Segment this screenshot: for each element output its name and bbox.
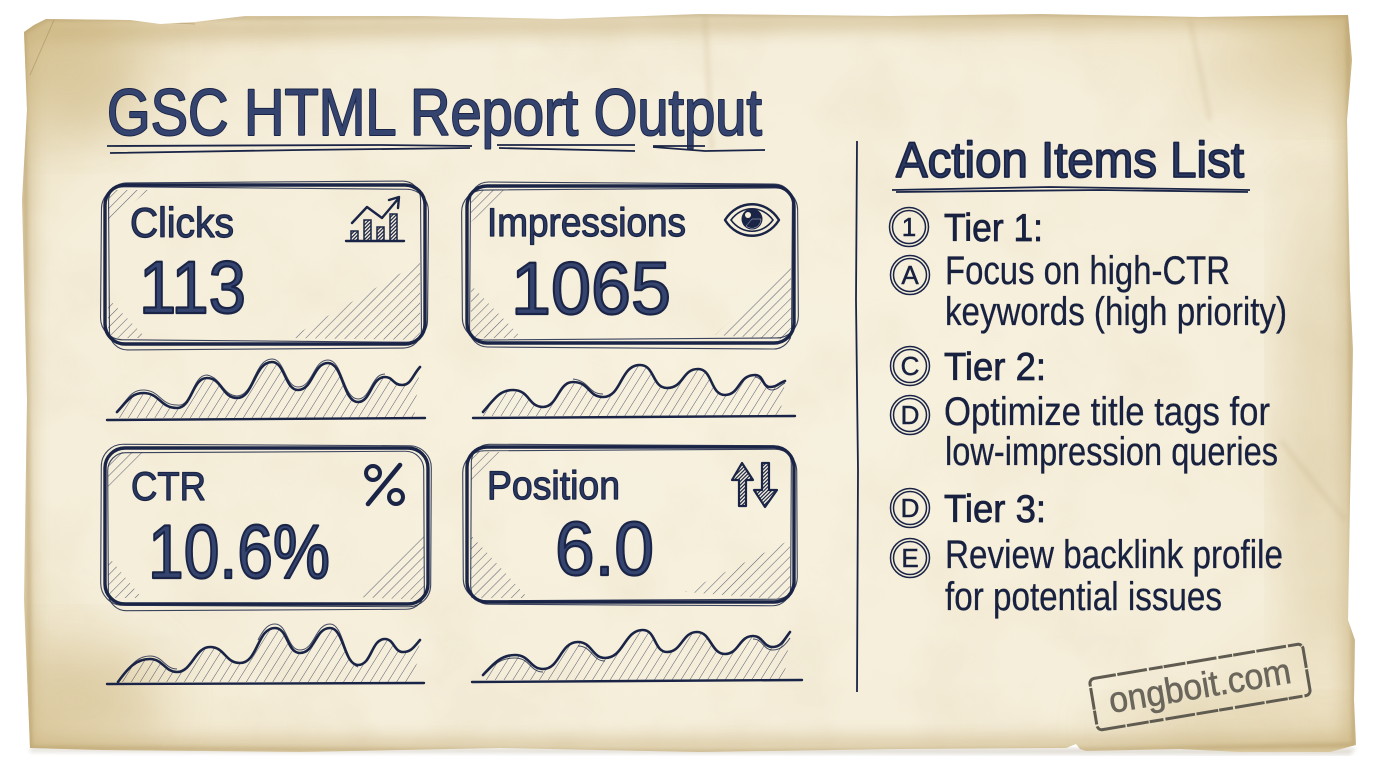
panel: position card bbox=[463, 444, 797, 606]
badge: C bbox=[890, 346, 930, 386]
item: tier 1 action: keywords (high priority) bbox=[945, 290, 1287, 334]
stamp: ongboit.com: ongboit.com bbox=[1106, 650, 1294, 721]
item: tier 3 action bbox=[945, 533, 1283, 619]
item: tier 3 action: for potential issues bbox=[945, 575, 1222, 619]
panel: impressions card bbox=[461, 182, 799, 349]
heading: action items list: Action Items List bbox=[896, 132, 1244, 188]
label: position: Position bbox=[487, 464, 620, 508]
corner hatching bbox=[471, 190, 791, 340]
label: ctr: CTR bbox=[131, 465, 206, 509]
corner hatching bbox=[471, 452, 790, 600]
title underline bbox=[107, 145, 765, 153]
item: tier 3 heading: Tier 3: bbox=[944, 488, 1046, 531]
badge: D second: D bbox=[901, 493, 919, 523]
panel: clicks card bbox=[100, 181, 429, 350]
corner hatching bbox=[108, 190, 420, 340]
badge: A: A bbox=[901, 260, 919, 290]
icon: rising chart bbox=[346, 197, 404, 241]
badge: E: E bbox=[901, 543, 919, 573]
item: tier 1 action: Focus on high-CTR bbox=[945, 249, 1230, 293]
title: GSC HTML Report Output bbox=[107, 75, 762, 149]
sparkline: clicks bbox=[107, 359, 425, 420]
item: tier 2 action: Optimize title tags for bbox=[944, 390, 1270, 434]
sparkline: position bbox=[472, 630, 802, 682]
panel: ctr card bbox=[101, 444, 431, 611]
item: tier 3 action: Review backlink profile bbox=[945, 533, 1283, 577]
label: impressions: Impressions bbox=[487, 201, 686, 245]
badge: 1 bbox=[890, 208, 928, 246]
item: tier 2 heading: Tier 2: bbox=[944, 346, 1046, 389]
label: clicks: Clicks bbox=[130, 199, 234, 246]
value: clicks: 113 bbox=[139, 246, 246, 329]
badge: E bbox=[890, 538, 930, 578]
heading underline bbox=[892, 187, 1250, 192]
item: tier 1 heading: Tier 1: bbox=[944, 207, 1043, 250]
sparkline: ctr bbox=[107, 624, 424, 684]
item: tier 2 action: low-impression queries bbox=[945, 430, 1278, 474]
badge: D second bbox=[890, 488, 930, 528]
icon: percent bbox=[366, 465, 403, 504]
vertical divider bbox=[856, 141, 858, 692]
item: tier 1 action bbox=[945, 249, 1287, 334]
value: ctr: 10.6% bbox=[148, 510, 330, 595]
badge: D: D bbox=[901, 400, 919, 430]
action list bbox=[890, 207, 1287, 619]
badge: C: C bbox=[901, 351, 919, 381]
badge: A bbox=[890, 256, 930, 294]
item: tier 2 action bbox=[944, 390, 1278, 474]
icon: up and down arrows bbox=[732, 463, 777, 507]
value: impressions: 1065 bbox=[511, 247, 671, 330]
badge: D bbox=[890, 396, 930, 434]
sparkline: impressions bbox=[473, 365, 795, 418]
value: position: 6.0 bbox=[555, 507, 654, 592]
icon: eye bbox=[725, 204, 779, 236]
corner hatching bbox=[108, 452, 424, 600]
badge: 1: 1 bbox=[902, 212, 916, 242]
